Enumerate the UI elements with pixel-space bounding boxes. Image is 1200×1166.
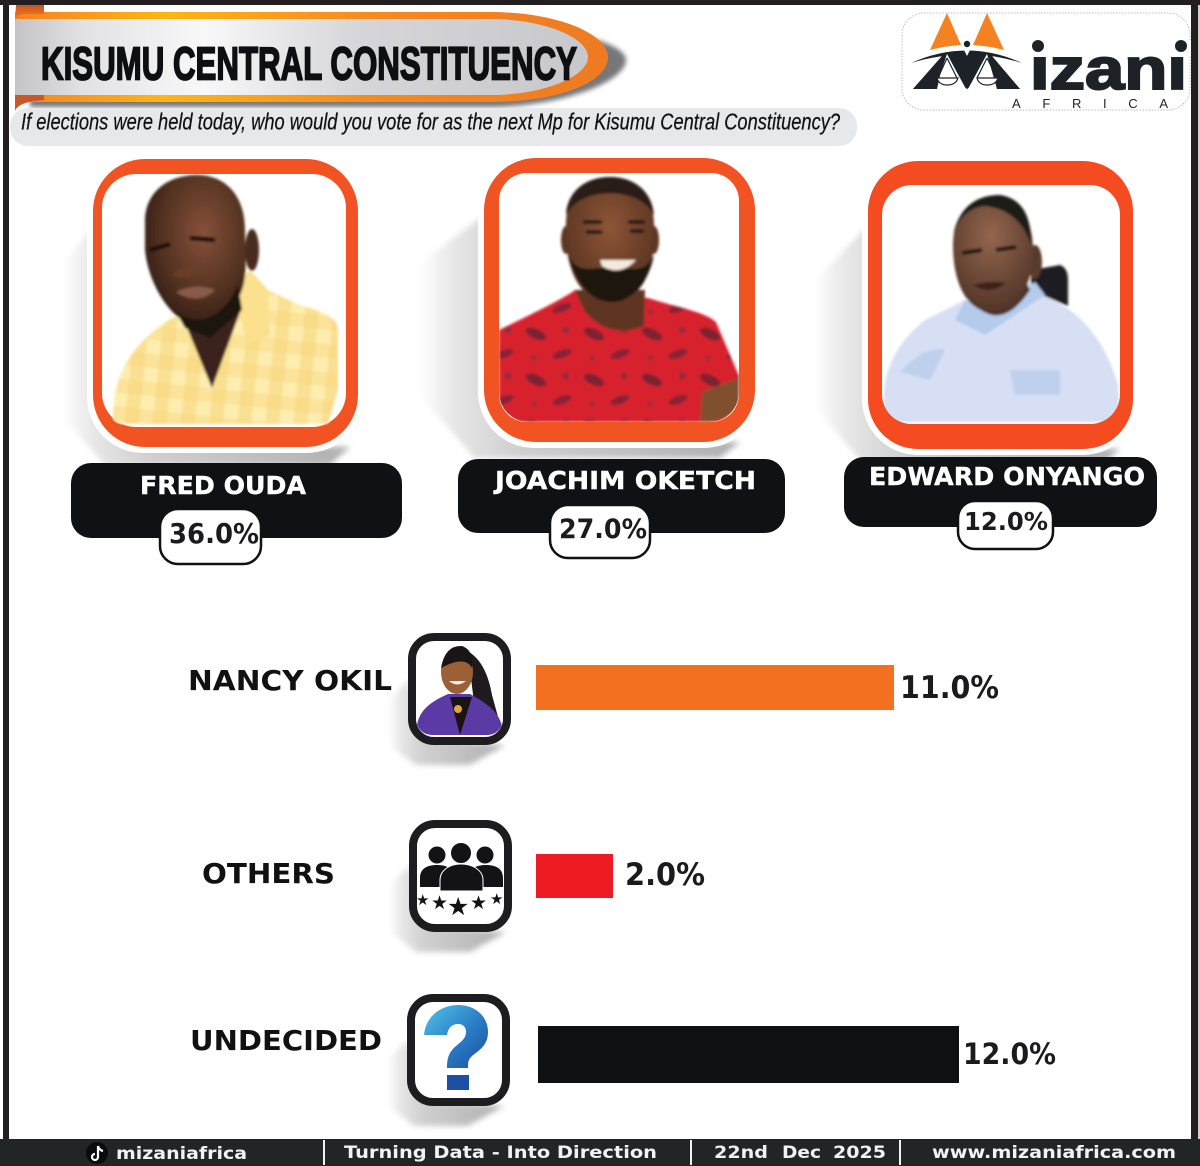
label: Undecided: UNDECIDED bbox=[190, 1024, 382, 1057]
icon: group with stars bbox=[391, 824, 508, 952]
name pill: Fred Ouda bbox=[71, 463, 402, 538]
logo: Mizani Africa: AFRICA bbox=[1012, 96, 1168, 111]
footer: date: Dec bbox=[782, 1143, 821, 1163]
photo frame: Joachim Oketch bbox=[424, 152, 760, 458]
footer: website: www.mizaniafrica.com bbox=[932, 1143, 1176, 1163]
icon: group with stars: ★ bbox=[490, 891, 503, 908]
name pill: Joachim Oketch: JOACHIM OKETCH bbox=[493, 466, 756, 495]
percent badge: Fred Ouda bbox=[160, 509, 261, 564]
question subtitle: If elections were held today, who would you vote for as the next Mp for Kisumu Central Constituency? bbox=[21, 108, 840, 134]
label: Others: OTHERS bbox=[202, 857, 335, 890]
icon: Nancy Okil portrait bbox=[390, 637, 507, 765]
photo frame: Edward Onyango bbox=[818, 155, 1139, 466]
logo: Mizani Africa bbox=[902, 13, 1191, 111]
value: Nancy Okil: 11.0% bbox=[900, 670, 999, 706]
percent badge: Edward Onyango bbox=[958, 501, 1053, 549]
percent badge: Fred Ouda: 36.0% bbox=[169, 517, 259, 550]
icon: group with stars: ★ bbox=[416, 892, 429, 909]
footer: date bbox=[714, 1143, 886, 1163]
icon: group with stars: ★ bbox=[470, 893, 487, 914]
question subtitle bbox=[10, 108, 857, 146]
name pill: Edward Onyango: EDWARD ONYANGO bbox=[869, 462, 1145, 491]
candidate card: Edward Onyango bbox=[818, 155, 1157, 549]
title text: KISUMU CENTRAL CONSTITUENCY bbox=[41, 38, 577, 90]
percent badge: Edward Onyango: 12.0% bbox=[964, 507, 1048, 536]
footer: handle: mizaniafrica bbox=[116, 1144, 247, 1164]
icon: group with stars: ★ bbox=[447, 893, 469, 921]
photo frame: Fred Ouda bbox=[66, 153, 363, 465]
icon: question mark bbox=[389, 998, 506, 1126]
row: Nancy Okil bbox=[188, 637, 999, 765]
name pill: Edward Onyango bbox=[844, 457, 1157, 527]
logo: Mizani Africa: izani bbox=[1030, 37, 1187, 102]
value: Others: 2.0% bbox=[625, 857, 705, 893]
footer: date: 2025 bbox=[833, 1143, 886, 1163]
percent badge: Joachim Oketch: 27.0% bbox=[559, 514, 647, 545]
footer: date: 22nd bbox=[714, 1143, 768, 1163]
row: Others bbox=[202, 824, 705, 952]
value: Undecided: 12.0% bbox=[963, 1037, 1056, 1071]
bar: Others bbox=[536, 854, 613, 898]
candidate card: Joachim Oketch bbox=[424, 152, 785, 558]
name pill: Fred Ouda: FRED OUDA bbox=[140, 471, 307, 500]
row: Undecided bbox=[190, 998, 1056, 1126]
name pill: Joachim Oketch bbox=[458, 459, 785, 533]
label: Nancy Okil: NANCY OKIL bbox=[188, 664, 392, 697]
candidate card: Fred Ouda bbox=[66, 153, 402, 564]
title banner bbox=[15, 5, 626, 111]
bar: Undecided bbox=[538, 1026, 959, 1083]
percent badge: Joachim Oketch bbox=[550, 505, 650, 558]
footer: slogan: Turning Data - Into Direction bbox=[344, 1143, 657, 1163]
icon: group with stars: ★ bbox=[431, 893, 448, 914]
icon: TikTok bbox=[86, 1142, 108, 1164]
footer bar bbox=[0, 1139, 1200, 1166]
bar: Nancy Okil bbox=[536, 665, 894, 710]
